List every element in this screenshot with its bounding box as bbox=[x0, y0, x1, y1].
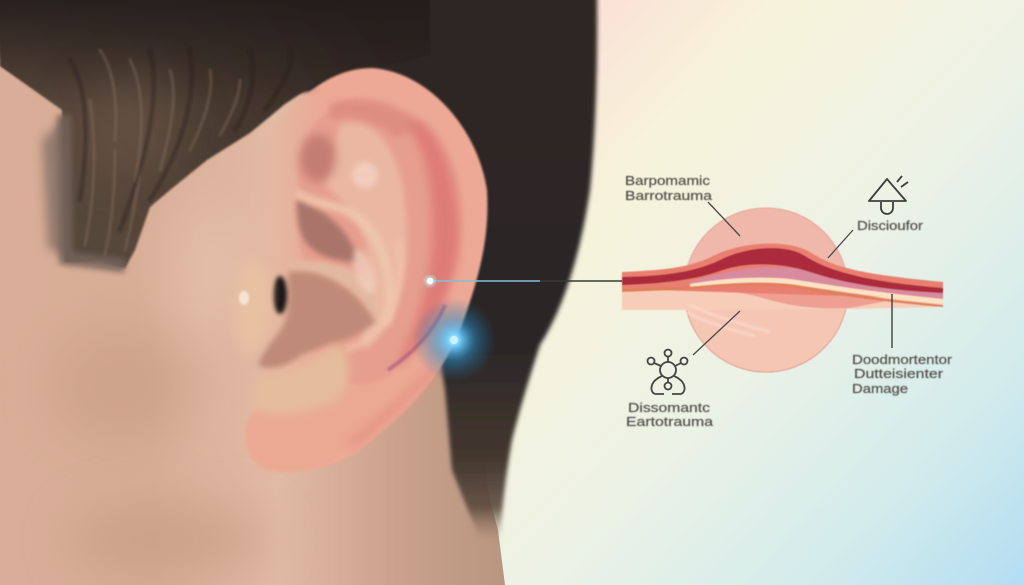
concha highlight bbox=[348, 247, 380, 297]
earlobe bbox=[246, 365, 425, 472]
fossa shadow bbox=[300, 134, 336, 182]
icon: network nodes bbox=[648, 350, 688, 394]
label: bottom left: Dissomantc bbox=[628, 401, 710, 415]
tragus bbox=[236, 261, 271, 353]
jaw shading bbox=[70, 500, 270, 580]
label: bottom right bbox=[852, 353, 952, 396]
antihelix crus bbox=[296, 193, 390, 325]
cream stripe bbox=[690, 278, 943, 304]
top dark fade bbox=[0, 0, 430, 94]
circle lower half bbox=[685, 300, 847, 372]
diagram: cross-section of eardrum bbox=[622, 208, 943, 372]
label: bottom right: Doodmortentor bbox=[852, 353, 952, 367]
leader line: bottom left bbox=[693, 311, 740, 355]
orange base line bbox=[622, 283, 943, 307]
hair streaks bbox=[70, 50, 291, 255]
upper concha shadow bbox=[297, 197, 358, 262]
lower callout line with glowing dot bbox=[412, 298, 696, 382]
circle bbox=[684, 208, 848, 372]
cheek shading bbox=[50, 325, 190, 445]
dark red layer bbox=[622, 248, 943, 293]
top membrane outer layer bbox=[622, 244, 943, 299]
ear bbox=[236, 68, 487, 472]
pale lower band bbox=[622, 280, 943, 310]
side highlight bbox=[165, 200, 245, 340]
top inner shade bbox=[330, 99, 425, 137]
inner helix region bbox=[298, 98, 462, 390]
label: top right: Discioufor bbox=[857, 219, 923, 233]
concha lower bowl bbox=[258, 271, 376, 368]
label: top left: Barrotrauma bbox=[625, 189, 712, 203]
upper callout line with dot bbox=[424, 275, 622, 287]
lobe lower tone bbox=[350, 368, 435, 445]
sideburn fuzz bbox=[42, 115, 90, 262]
swept highlights bbox=[686, 305, 770, 336]
icon: alert bell bbox=[869, 176, 908, 214]
face and neck skin bbox=[0, 60, 505, 585]
label: top left: Barpomamic bbox=[625, 174, 710, 188]
soft hair edge bbox=[64, 115, 125, 266]
top hair bbox=[0, 0, 430, 268]
hair texture bbox=[0, 0, 435, 255]
label: top left bbox=[625, 174, 712, 203]
back hair bbox=[280, 0, 597, 540]
label: bottom left: Eartotrauma bbox=[626, 415, 713, 429]
ear outer shape bbox=[250, 68, 487, 470]
leader line: bottom right bbox=[891, 294, 893, 348]
middle band skin bbox=[285, 261, 378, 320]
background gradient bbox=[480, 0, 1024, 585]
label: bottom left bbox=[626, 401, 713, 429]
label: bottom right: Damage bbox=[852, 382, 908, 396]
upper highlight bbox=[352, 162, 378, 188]
pink layer bbox=[690, 267, 943, 299]
tragus shine bbox=[239, 291, 249, 305]
antihelix lower ridge bbox=[345, 240, 400, 350]
photo: head with hair bbox=[0, 0, 597, 585]
ear canal bbox=[273, 276, 287, 314]
antitragus bbox=[252, 345, 349, 415]
label: bottom right: Dutteisienter bbox=[854, 367, 943, 381]
scapha red band bbox=[395, 118, 459, 370]
leader line: top right bbox=[828, 230, 853, 258]
salmon deeper tissue bbox=[720, 287, 892, 309]
central antihelix skin bbox=[325, 123, 407, 350]
leader line: top left bbox=[708, 202, 740, 236]
purple crease bbox=[388, 305, 445, 370]
hair highlight bbox=[80, 80, 180, 180]
